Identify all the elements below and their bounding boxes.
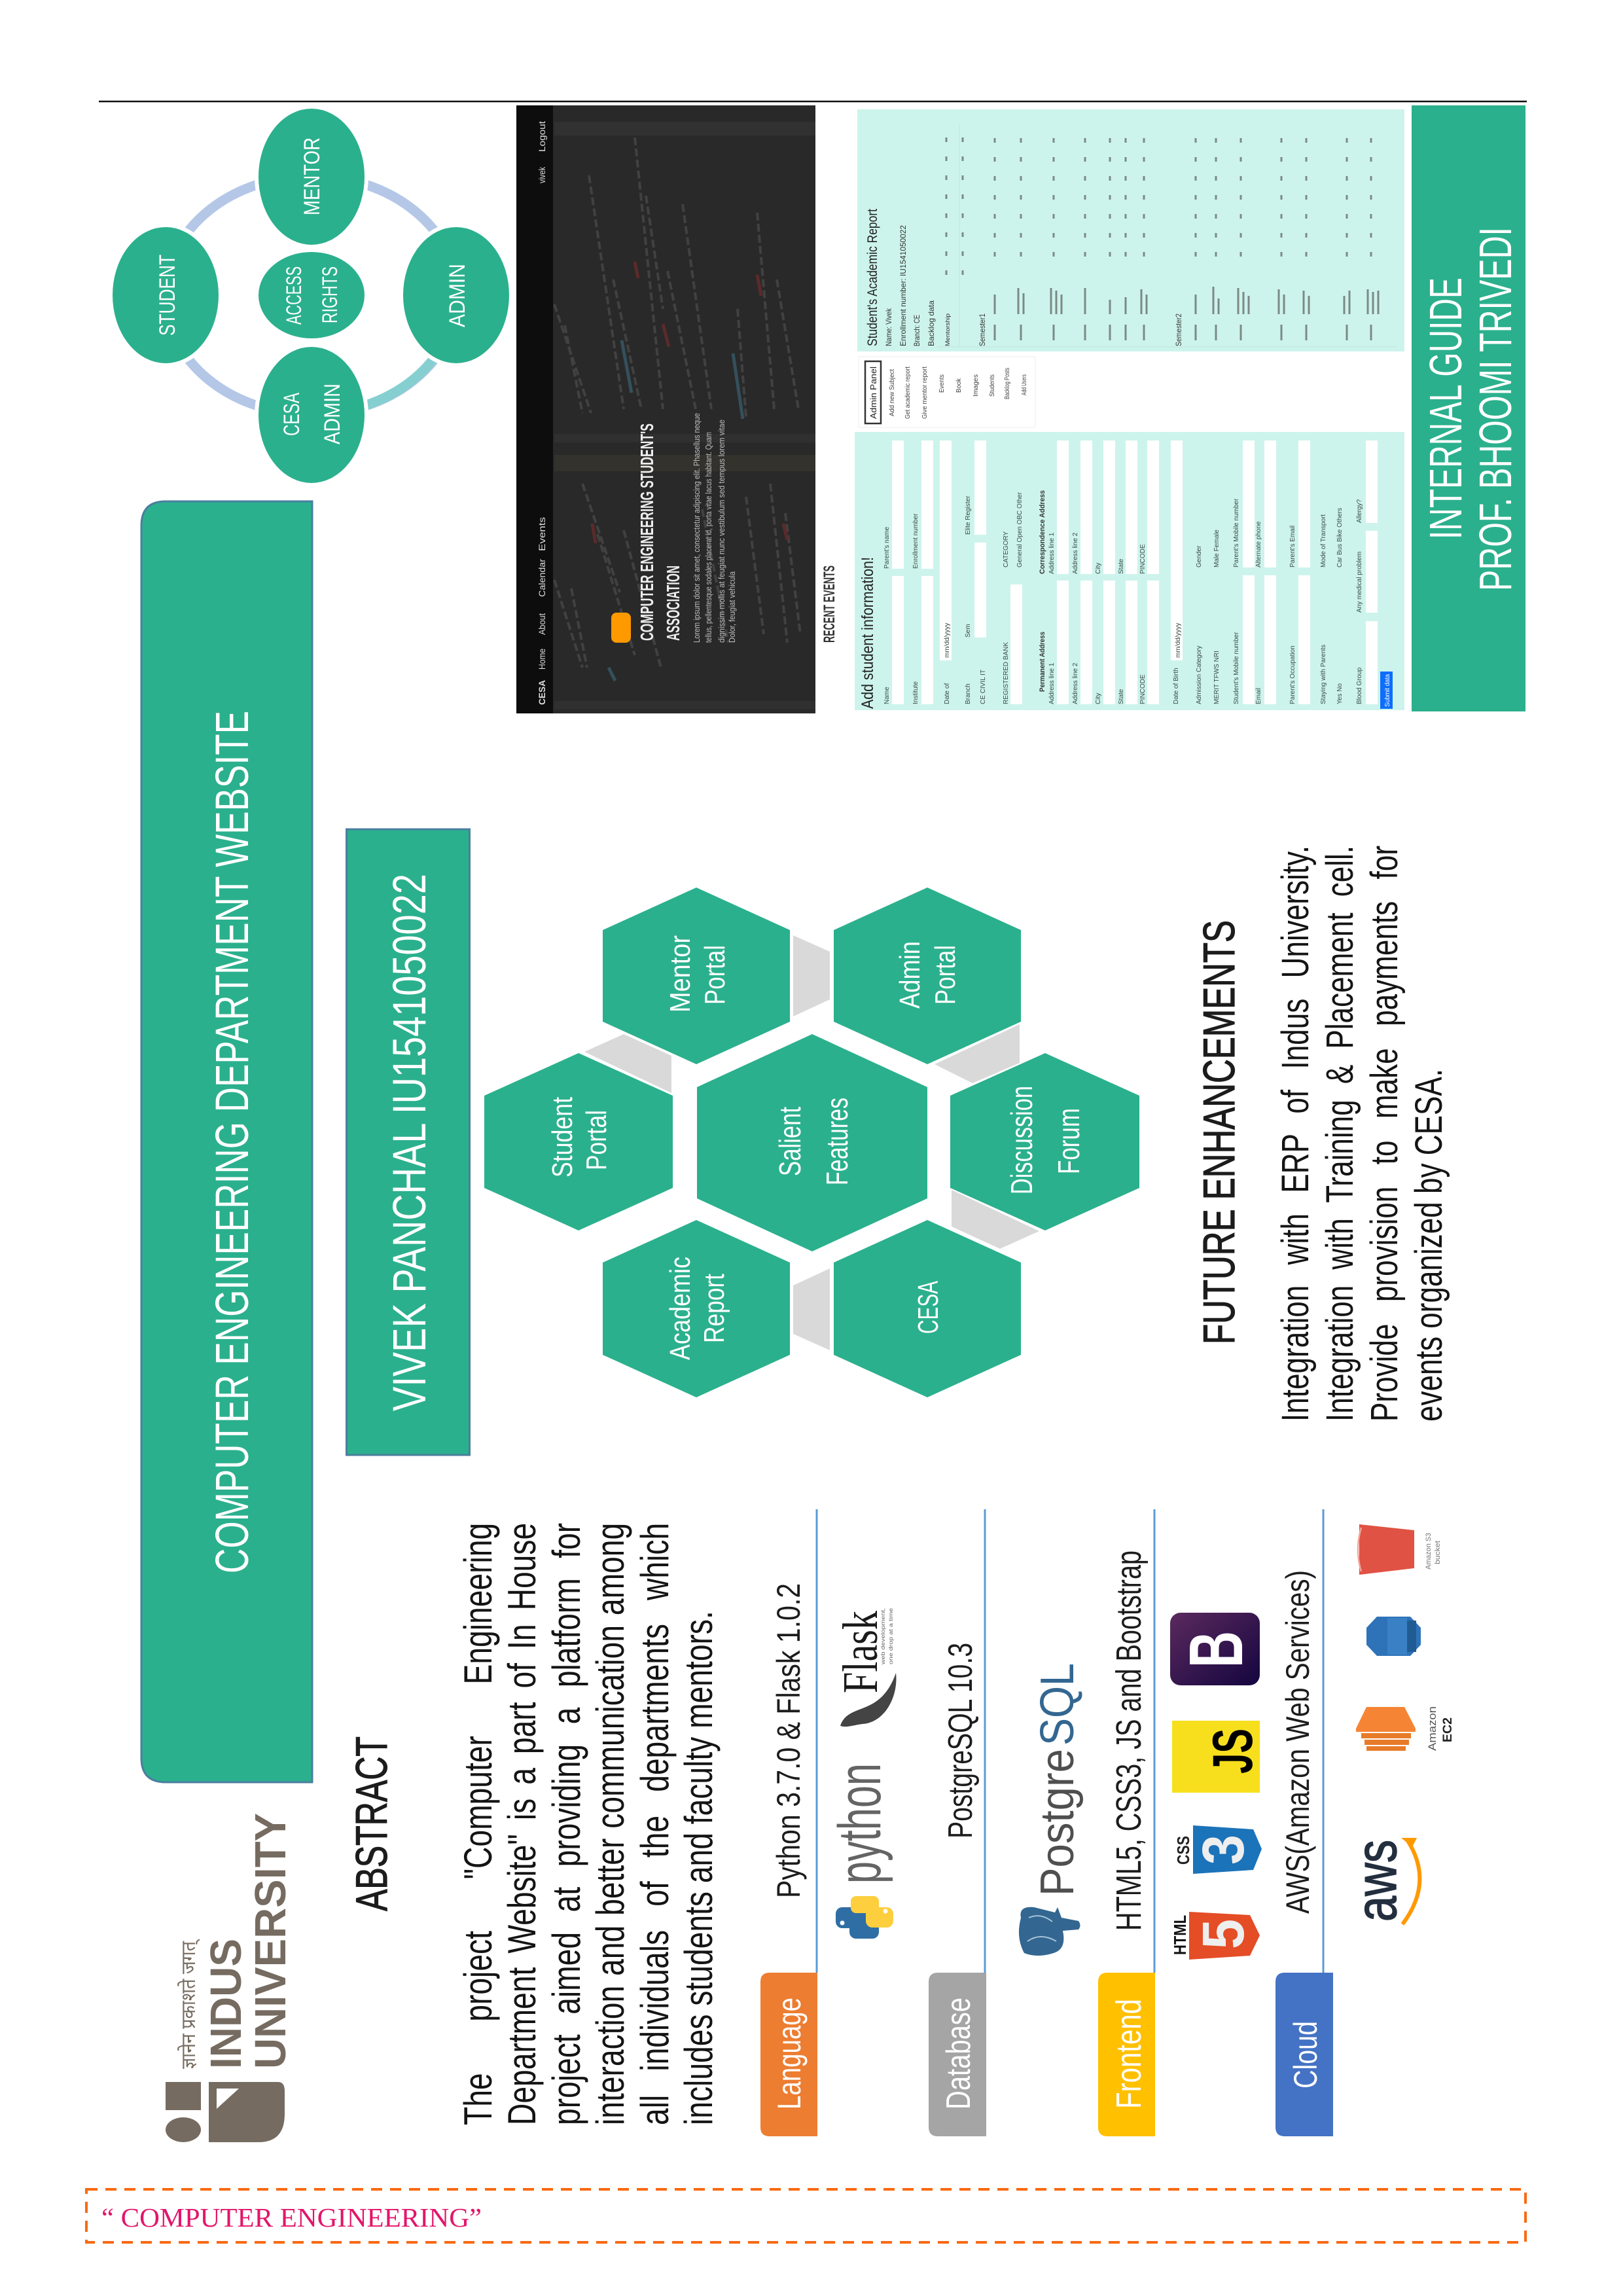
icon: python: python [827,1763,893,1884]
node: access rights: RIGHTS [318,266,342,323]
form field labels: Gender [1196,545,1203,567]
screenshot: add student form [855,432,1404,710]
diagram: access rights cycle [111,107,511,485]
form field labels: Admission Category [1196,646,1203,704]
screenshot: student academic report: Name: Vivek [884,308,893,346]
form field labels: MERIT TFWS NRI [1213,651,1221,704]
icon: javascript: JS [1202,1729,1264,1774]
screenshot navigation bar: Events [537,517,547,551]
form field labels: General Open OBC Other [1016,492,1024,567]
screenshot hero copy: Lorem ipsum dolor sit amet, consectetur adipiscing elit. Phasellus neque [692,413,702,643]
node: student: STUDENT [155,255,180,336]
hexagon: cesa [834,1220,1021,1397]
form field labels: Branch [965,683,972,704]
hexagon: salient features [697,1034,927,1251]
screenshot hero badge [611,613,631,643]
form field labels: City [1095,693,1102,704]
hexagon: admin portal [834,888,1021,1064]
screenshot hero copy [692,413,737,643]
abstract paragraph: includes students and faculty mentors. [677,1611,721,2125]
form field labels: Mode of Transport [1320,514,1327,567]
node: access rights [259,252,365,338]
future enhancements list [1274,846,1450,1422]
technology row: frontend [1098,1509,1264,2136]
form field labels: Car Bus Bike Others [1336,508,1344,567]
university logo: ज्ञानेन प्रकाशते जगत् [177,1939,200,2069]
form input fields [892,440,1378,704]
icon: postgresql: Postgre [1031,1749,1084,1896]
technology row: cloud [1275,1509,1455,2136]
form field labels: Correspondence Address [1039,490,1046,574]
screenshot: admin panel menu: Backlog Posts [1004,368,1011,399]
form field labels: Allergy? [1356,499,1363,523]
screenshot navigation bar: Logout [537,121,547,152]
icon: flask: Flask [833,1611,888,1693]
hexagon: discussion forum: Forum [1052,1108,1086,1174]
technology row: database [929,1509,1084,2136]
screenshot: add student form: Add student information! [859,557,877,709]
icon: flask: web development, [880,1608,886,1665]
form field labels: Date of Birth [1173,668,1180,704]
form field labels: PINCODE [1139,544,1147,574]
form field labels [883,490,1363,704]
node: cesa admin: CESA [279,393,304,436]
screenshot navigation bar: CESA [537,680,547,705]
node: mentor: MENTOR [300,137,325,215]
report table cell values [946,124,1371,275]
screenshot caption: recent events: RECENT EVENTS [821,565,838,643]
technology row: database: PostgreSQL 10.3 [942,1643,980,1839]
future enhancements list: events organized by CESA. [1408,1069,1450,1422]
icon: flask [833,1607,896,1727]
student name banner: VIVEK PANCHAL IU1541050022 [384,874,436,1411]
internal guide banner: PROF. BHOOMI TRIVEDI [1470,227,1521,591]
screenshot navigation bar: About [537,613,547,635]
screenshot hero copy: dignissim mollis at feugiat nunc vestibulum sed tempus lorem vitae [717,420,726,643]
screenshot: admin panel menu: Students [989,374,996,397]
abstract paragraph [456,1523,721,2125]
screenshot hero copy: tellus, pellentesque sodales placerat id, porta vitae lacus habitant. Quam [704,432,713,643]
screenshot navigation bar [537,121,547,705]
hexagon: academic report [603,1220,790,1397]
future enhancements list: Provide provision to make payments for [1363,846,1406,1422]
form field labels: Enrollment number [912,513,919,569]
screenshot: admin panel menu: Add new Subject [889,369,896,416]
university logo: INDUS [202,1939,251,2069]
form field labels: Parent's name [883,526,891,569]
screenshot: admin panel menu: Admin Panel [868,367,878,419]
footer: department tag [86,2189,1525,2242]
screenshot: admin panel menu: Book [955,378,963,393]
icon: bootstrap: B [1173,1631,1258,1668]
form field labels: Parent's Occupation [1289,645,1296,704]
form field labels: Parent's Mobile number [1233,498,1240,567]
screenshot: admin panel menu: Give mentor report [921,367,929,419]
screenshot: admin panel menu: Add Users [1021,374,1028,395]
node: cesa admin [257,345,366,485]
form field labels: Male Female [1213,529,1221,567]
screenshot: admin panel menu: Get academic report [904,367,912,419]
form field labels: Permanent Address [1039,632,1046,692]
form field labels: State [1118,689,1125,704]
screenshot navigation bar: Calendar [537,559,547,597]
icon: postgresql: SQL [1031,1663,1084,1746]
screenshot: student academic report [857,109,1404,351]
form field labels: Date of [944,683,951,704]
technology row: language [760,1509,896,2136]
form field labels: Email [1255,688,1262,704]
technology row: cloud: Cloud [1287,2021,1324,2089]
icon: css3: CSS [1173,1836,1193,1865]
technology row: cloud: AWS(Amazon Web Services) [1279,1570,1316,1914]
title banner: COMPUTER ENGINEERING DEPARTMENT WEBSITE [207,711,259,1573]
screenshot: student academic report: Branch: CE [912,315,921,346]
screenshot hero heading: COMPUTER ENGINEERING STUDENT'S [637,423,657,641]
icon: html5: 5 [1191,1919,1257,1949]
form field labels: Address line 2 [1072,532,1079,574]
hexagon: admin portal: Admin [894,941,926,1009]
hexagon: discussion forum: Discussion [1005,1086,1039,1194]
screenshot navigation bar: Home [537,649,547,670]
future enhancements heading: FUTURE ENHANCEMENTS [1194,920,1244,1344]
hexagon: admin portal: Portal [929,945,961,1005]
form field labels: CATEGORY [1003,531,1010,567]
student name banner [347,829,470,1455]
technology row: frontend: HTML5, CSS3, JS and Bootstrap [1109,1551,1149,1931]
screenshot: student academic report: Mentorship [944,314,951,346]
form field labels: Address line 1 [1048,532,1056,574]
form field labels: State [1118,558,1125,574]
form field labels: Sem [965,624,972,637]
hexagon: student portal: Student [546,1097,579,1177]
form field labels: mm/dd/yyyy [944,623,951,658]
icon: amazon database [1366,1617,1421,1656]
abstract paragraph: Department Website" is a part of In House [500,1523,544,2125]
icon: flask: one drop at a time [888,1607,894,1664]
form submit button [1380,672,1393,709]
node: admin: ADMIN [445,264,470,327]
form field labels: Yes No [1336,683,1344,704]
screenshot hero heading: ASSOCIATION [663,565,683,641]
hexagon: mentor portal: Mentor [664,935,696,1013]
icon: css3 [1173,1825,1262,1874]
screenshot: student academic report: Backlog data [927,300,936,346]
screenshot: admin panel menu [859,357,1035,427]
hexagon: student portal: Portal [580,1110,613,1170]
abstract paragraph: The project "Computer Engineering [456,1523,500,2125]
node: access rights: ACCESS [282,266,306,325]
screenshot navigation bar: vivek [537,166,547,183]
screenshot: admin panel menu: Images [972,374,980,397]
form field labels: Alternate phone [1255,521,1262,567]
form field labels: Student's Mobile number [1233,632,1240,704]
hexagon: student portal [484,1053,673,1230]
university logo [166,1813,295,2142]
form field labels: PINCODE [1139,674,1147,704]
icon: amazon s3: bucket [1434,1541,1442,1564]
internal guide banner [1412,105,1525,711]
future enhancements list: Integration with Training & Placement cell. [1319,846,1361,1422]
form submit button: Submit data [1384,674,1391,707]
form field labels: mm/dd/yyyy [1175,623,1182,658]
node: mentor [257,107,366,247]
form field labels: CE CIVIL IT [980,670,987,704]
icon: css3: 3 [1191,1835,1257,1865]
hexagon: mentor portal: Portal [699,945,731,1005]
hexagon: salient features: Salient [773,1107,807,1176]
screenshot: student academic report: Semester2 [1174,314,1183,346]
abstract paragraph: project aimed at providing a platform for [544,1523,588,2125]
form field labels: Any medical problem [1356,552,1363,613]
icon: postgresql [1019,1663,1084,1956]
form field labels: Address line 1 [1048,662,1056,704]
hexagon: salient features: Features [820,1098,854,1185]
node: admin [401,225,511,365]
hexagon: academic report: Report [698,1274,730,1343]
form field labels: Address line 2 [1072,662,1079,704]
icon: amazon s3 [1358,1524,1442,1575]
technology row: language: Python 3.7.0 & Flask 1.0.2 [770,1583,807,1898]
screenshot: cesa website home page [516,105,815,713]
university logo: UNIVERSITY [246,1813,295,2069]
hexagon: academic report: Academic [664,1257,696,1360]
abstract paragraph: interaction and better communication among [588,1523,632,2125]
form field labels: Parent's Email [1289,526,1296,567]
icon: amazon s3: Amazon S3 [1425,1533,1433,1570]
salient features hexagon diagram [484,888,1139,1397]
form field labels: City [1095,563,1102,574]
footer: department tag: “ COMPUTER ENGINEERING” [101,2202,482,2233]
technology row: frontend: Frontend [1109,1999,1149,2109]
screenshot hero copy: Dolor, feugiat vehicula [727,571,737,643]
hexagon: discussion forum [950,1053,1139,1230]
icon: html5 [1170,1912,1260,1960]
icon: amazon ec2: Amazon [1426,1706,1438,1751]
icon: aws: aws [1344,1840,1408,1922]
screenshot hero heading [637,423,683,641]
screenshot: admin panel menu: Events [938,374,946,393]
abstract heading: ABSTRACT [347,1736,397,1911]
technology row: language: Language [771,1998,808,2109]
screenshot: student academic report: Student's Academic Report [865,209,880,346]
icon: javascript [1172,1721,1264,1793]
node: cesa admin: ADMIN [320,384,345,444]
screenshot: student academic report: Enrollment number: IU1541050022 [899,225,908,346]
hexagon: cesa: CESA [912,1281,944,1334]
screenshot: student academic report: Semester1 [978,314,987,346]
node: student [111,225,221,365]
title banner [141,501,312,1782]
icon: html5: HTML [1170,1915,1190,1955]
form field labels: Name [883,687,891,704]
internal guide banner: INTERNAL GUIDE [1420,278,1471,539]
form field labels: Staying with Parents [1320,645,1327,704]
form field labels: Blood Group [1356,667,1363,704]
future enhancements list: Integration with ERP of Indus University. [1274,846,1317,1422]
technology row: database: Database [940,1998,978,2109]
icon: python [827,1763,893,1939]
form field labels: Institute [912,681,919,704]
abstract paragraph: all individuals of the departments which [633,1523,677,2125]
form field labels: REGISTERED BANK [1003,642,1010,704]
icon: aws [1344,1838,1419,1924]
hexagon: mentor portal [603,888,790,1064]
form field labels: Elite Register [965,495,972,535]
icon: amazon ec2: EC2 [1441,1717,1455,1742]
icon: amazon ec2 [1356,1706,1455,1751]
